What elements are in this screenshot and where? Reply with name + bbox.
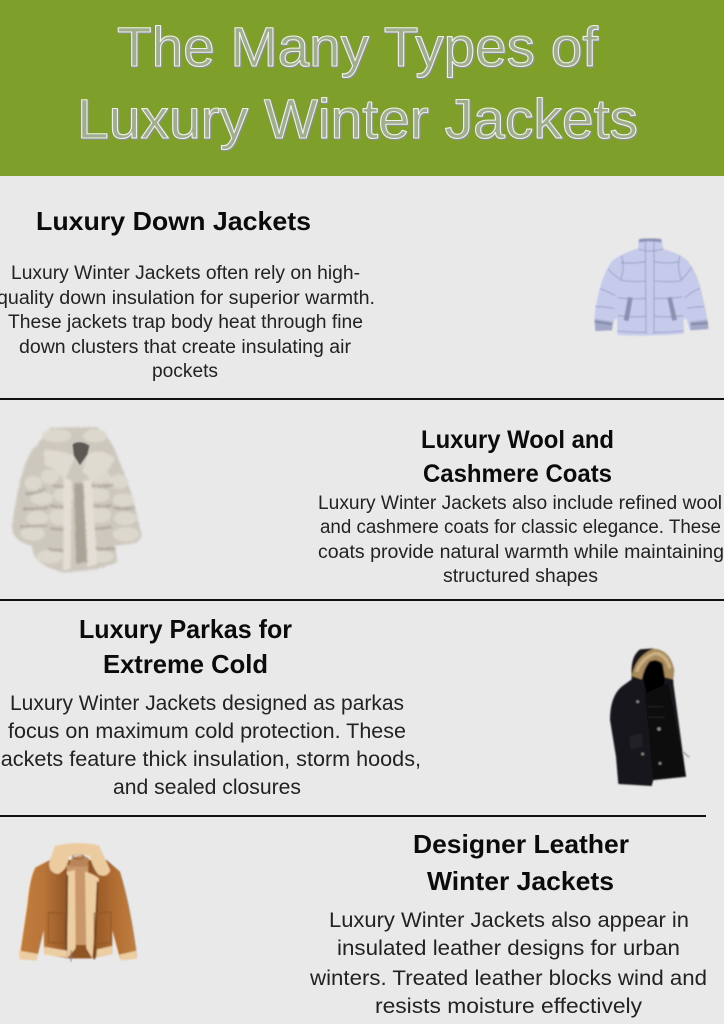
icon: brown shearling leather jacket [19,843,138,962]
text block: down jackets description [0,263,375,382]
panel: designer leather winter jackets [19,829,707,1018]
text block: parkas description: Luxury Winter Jackets designed as parkas [10,692,404,715]
icon: fur coat [12,427,141,572]
text block: wool coats description: coats provide natural warmth while maintaining [318,542,724,563]
text block: down jackets description: pockets [152,361,218,382]
heading: designer leather winter jackets: Winter Jackets [427,866,614,896]
icon: black parka with fur hood [610,648,689,786]
title: Luxury Winter Jackets [77,87,638,150]
text block: down jackets description: Luxury Winter Jackets often rely on high- [11,263,360,284]
panel: parkas for extreme cold [0,614,689,799]
text block: parkas description: focus on maximum cold protection. These [8,720,406,743]
title: Luxury Winter Jackets [78,88,639,151]
heading: wool and cashmere coats: Luxury Wool and [421,426,614,454]
heading: luxury down jackets: Luxury Down Jackets [36,206,311,236]
heading: wool and cashmere coats [421,426,614,488]
divider [0,599,724,601]
title: The Many Types of [117,15,598,78]
heading: parkas for extreme cold: Luxury Parkas for [79,614,292,644]
text block: wool coats description: Luxury Winter Jackets also include refined wool [318,493,722,514]
divider [0,815,706,817]
title: The Many Types of [118,16,600,79]
heading: designer leather winter jackets: Designer Leather [413,829,629,859]
text block: leather jackets description [309,909,707,1018]
text block: parkas description: and sealed closures [113,776,301,799]
text block: leather jackets description: insulated leather designs for urban [337,937,680,960]
title [77,15,639,151]
text block: wool coats description: structured shapes [443,566,598,587]
text block: down jackets description: down clusters that create insulating air [19,337,352,358]
icon: lavender puffer jacket [594,238,709,336]
text block: wool coats description: and cashmere coats for classic elegance. These [320,517,721,538]
header banner [0,0,724,176]
panel: luxury down jackets [0,206,709,382]
text block: down jackets description: quality down insulation for superior warmth. [0,288,375,309]
heading: designer leather winter jackets [413,829,629,896]
heading: wool and cashmere coats: Cashmere Coats [423,460,612,488]
text block: down jackets description: These jackets trap body heat through fine [8,312,363,333]
text block: leather jackets description: resists moisture effectively [375,995,643,1018]
text block: leather jackets description: winters. Treated leather blocks wind and [309,967,707,990]
panel: wool and cashmere coats [12,426,724,587]
text block: parkas description [0,692,421,799]
divider [0,398,724,400]
text block: parkas description: jackets feature thick insulation, storm hoods, [0,748,421,771]
heading: parkas for extreme cold [79,614,292,679]
text block: leather jackets description: Luxury Winter Jackets also appear in [329,909,689,932]
heading: parkas for extreme cold: Extreme Cold [103,649,268,679]
text block: wool coats description [318,493,724,587]
